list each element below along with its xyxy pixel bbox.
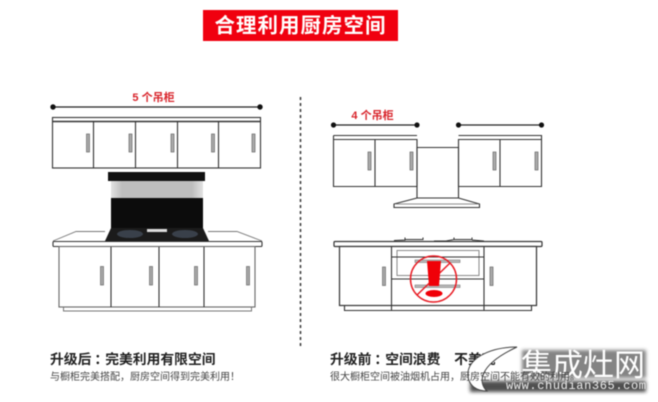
dimension: 4 cabinets: 4 个吊柜 — [351, 109, 394, 122]
caption: after upgrade — [50, 348, 240, 383]
dimension: 5 cabinets: 5 个吊柜 — [132, 91, 175, 104]
upper cabinets, left pair — [334, 136, 417, 186]
range hood — [394, 148, 480, 208]
dimension: 4 cabinets — [331, 109, 544, 128]
upper cabinets, five doors — [52, 118, 260, 168]
counter and base cabinets, four doors — [53, 232, 262, 311]
caption: after upgrade: 与橱柜完美搭配，厨房空间得到完美利用！ — [50, 370, 240, 383]
watermark: 集成灶网 logo — [468, 347, 646, 393]
integrated stove appliance — [105, 172, 209, 241]
warning icon: prohibited exclamation mark — [410, 256, 456, 302]
title banner — [203, 10, 398, 41]
caption: after upgrade: 升级后：完美利用有限空间 — [50, 348, 216, 368]
dimension: 5 cabinets — [50, 91, 263, 110]
logo swoosh — [468, 347, 517, 391]
panel: before upgrade kitchen — [331, 109, 544, 311]
caption subtext: before upgrade: 很大橱柜空间被油烟机占用，厨房空间不能有效的利用。 — [330, 370, 580, 383]
upper cabinets, right pair — [458, 136, 542, 186]
center dashed divider — [300, 97, 302, 346]
panel: after upgrade kitchen — [50, 91, 263, 311]
watermark title: 集成灶网 — [521, 348, 645, 383]
counter and base cabinets with burners — [334, 238, 542, 311]
watermark shadow — [522, 350, 646, 378]
watermark url: www.chudian365.com — [506, 379, 646, 393]
caption heading: before upgrade: 升级前：空间浪费 不美观 — [330, 348, 496, 368]
title banner: 合理利用厨房空间 — [214, 14, 386, 38]
